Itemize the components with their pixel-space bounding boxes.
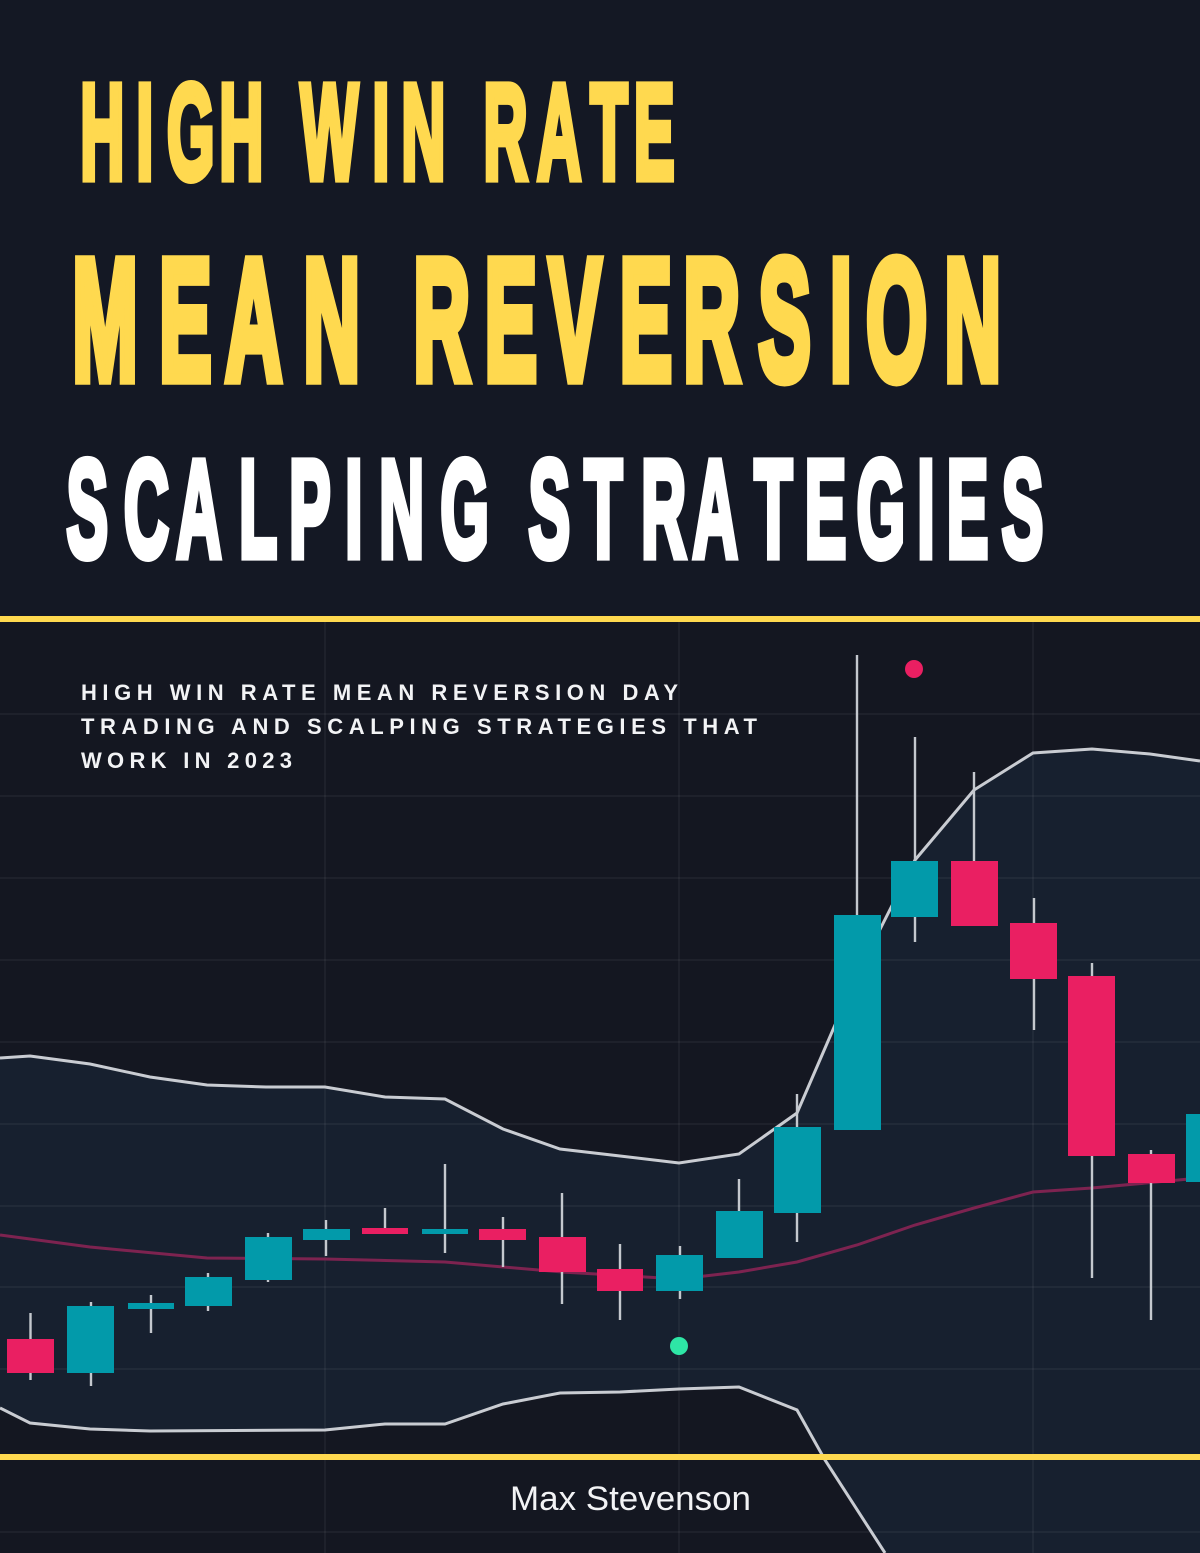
title line 1: HIGH [80,57,263,208]
subtitle: HIGH WIN RATE MEAN REVERSION DAY [81,680,678,705]
moving average line [0,1178,1200,1279]
bearish candles [7,861,1175,1373]
sell signal dot [905,660,923,678]
subtitle: TRADING AND SCALPING STRATEGIES THAT [81,714,758,739]
bullish candles [67,861,1200,1373]
lower band line [0,1387,885,1553]
upper band line [0,749,1200,1163]
title line 2: MEAN [72,225,360,416]
bollinger band fill [0,749,1200,1553]
author name: Max Stevenson [510,1480,751,1518]
chart backdrop [0,622,1200,1553]
title line 2 [72,225,1001,416]
title line 3: STRATEGIES [529,431,1043,586]
title line 3: SCALPING [67,431,489,586]
subtitle: WORK IN 2023 [81,748,292,773]
title line 1: WIN [301,57,445,208]
chart panel [0,622,1200,1553]
top yellow divider [0,616,1200,622]
candlestick wicks [30,655,1151,1386]
title line 1 [80,57,675,208]
bottom yellow divider [0,1454,1200,1460]
title line 1: RATE [484,57,675,208]
subtitle [81,680,758,773]
title line 2: REVERSION [414,225,1001,416]
title line 3 [67,431,1043,586]
buy signal dot [670,1337,688,1355]
